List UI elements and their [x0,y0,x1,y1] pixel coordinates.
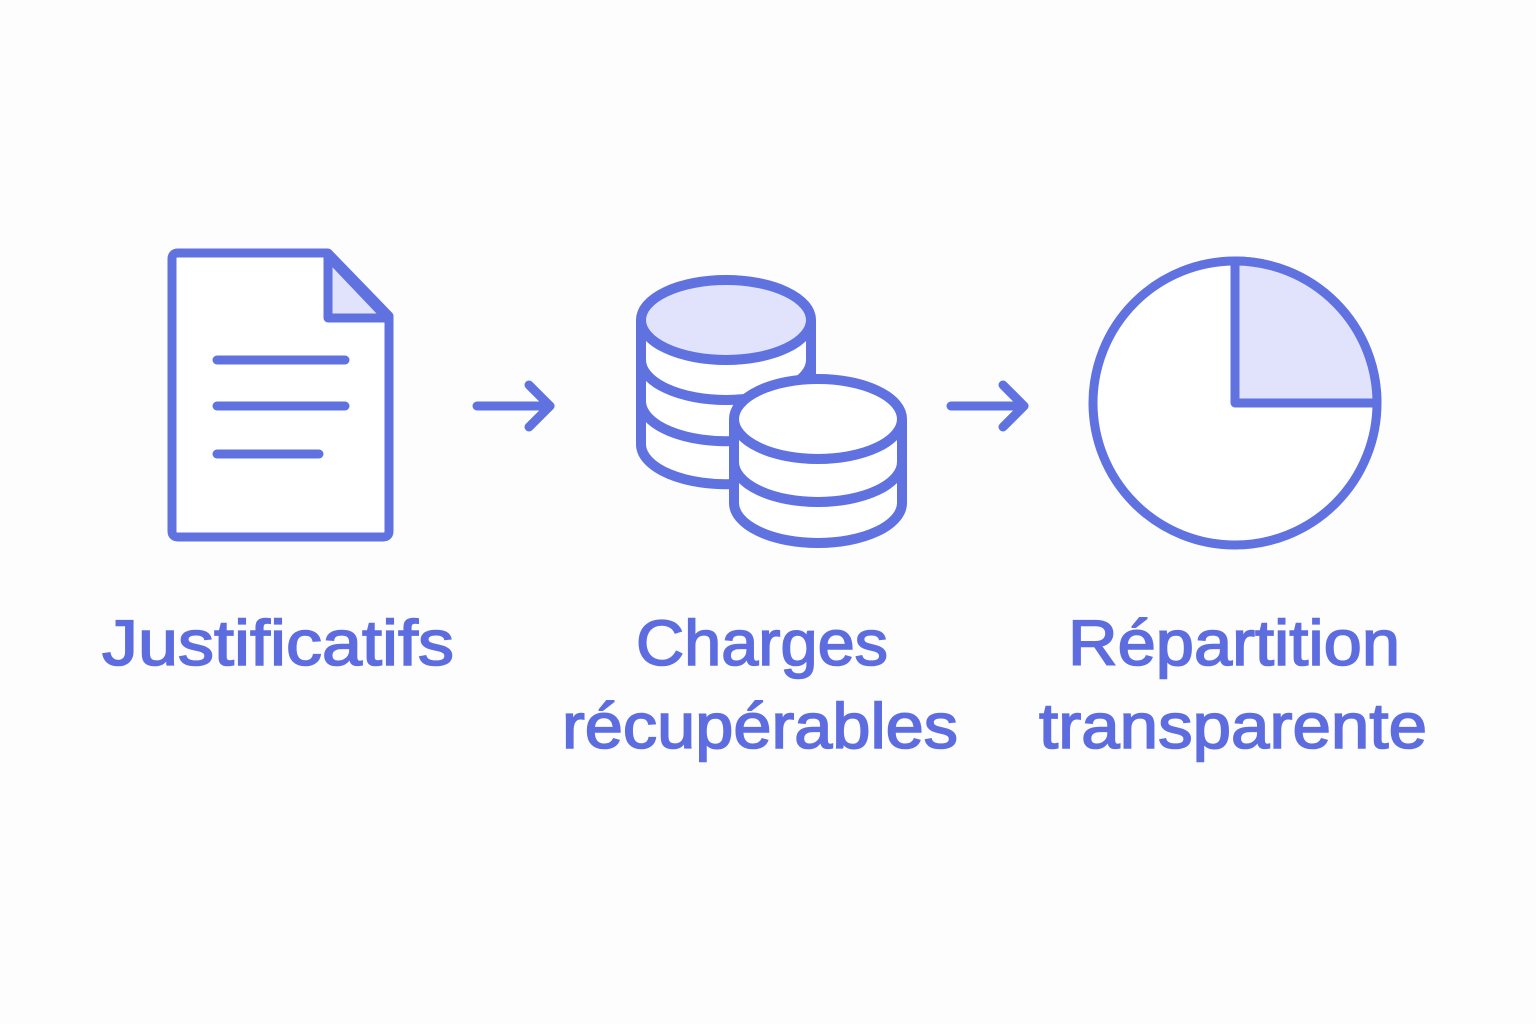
label: Charges récupérables [562,607,958,762]
label: Justificatifs: Justificatifs [102,607,454,679]
arrow 1 [477,385,550,427]
icon: pie chart [1093,261,1377,545]
label: Répartition transparente: transparente [1039,690,1427,762]
label: Répartition transparente [1039,607,1427,762]
arrow 2 [951,385,1024,427]
icon: coins [641,280,902,543]
label: Charges récupérables: Charges [636,607,888,679]
icon: document [172,253,389,537]
label: Répartition transparente: Répartition [1068,607,1400,679]
label: Charges récupérables: récupérables [562,690,958,762]
